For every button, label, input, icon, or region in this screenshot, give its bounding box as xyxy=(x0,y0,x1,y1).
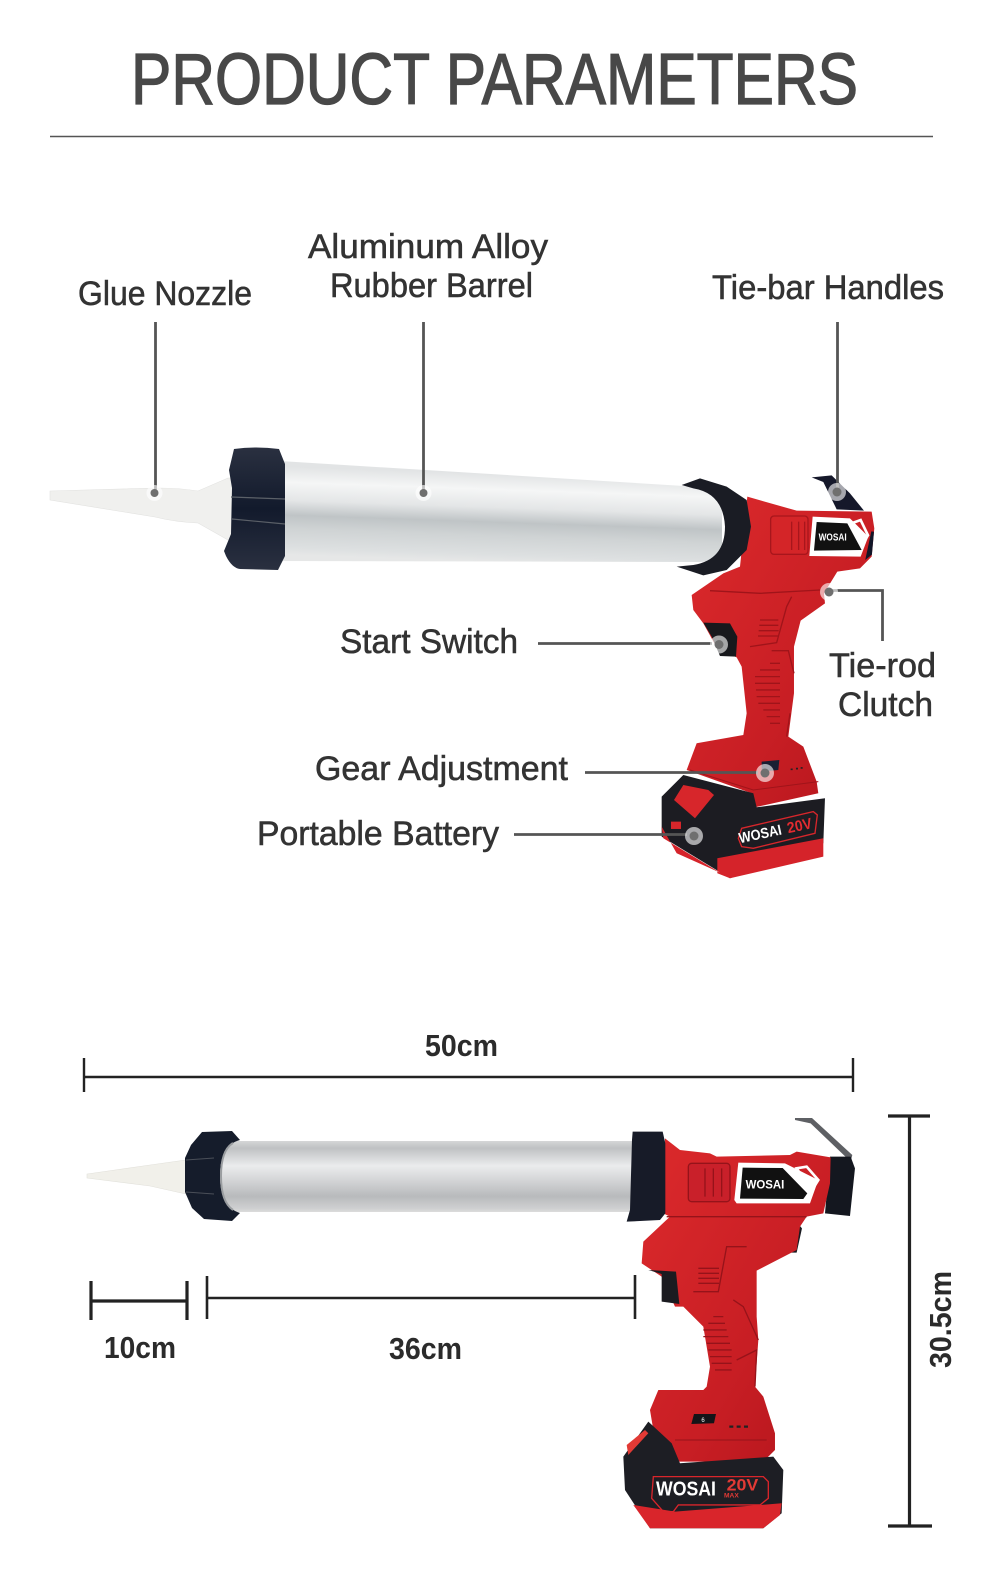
icon: side vent panel xyxy=(688,1163,730,1202)
icon: battery logo: 20V xyxy=(786,815,814,837)
icon: tie-bar handle xyxy=(795,1118,852,1162)
icon: grip ribs xyxy=(710,590,820,737)
callout: Gear Adjustment: Gear Adjustment xyxy=(315,750,569,788)
icon: gun body xyxy=(623,1118,855,1528)
dimension: barrel length 36cm: 36cm xyxy=(389,1331,462,1366)
callout: Gear Adjustment xyxy=(315,750,774,788)
icon: battery logo xyxy=(737,812,817,848)
icon: rear collar xyxy=(627,1132,665,1222)
dimension: total length 50cm: 50cm xyxy=(425,1028,498,1063)
icon: trigger xyxy=(648,1270,679,1304)
callout: Tie-bar Handles xyxy=(712,269,944,501)
callout: Tie-rod Clutch: Tie-rod xyxy=(829,647,936,685)
callout: Aluminum Alloy Rubber Barrel: Aluminum Alloy xyxy=(308,228,548,266)
icon: WOSAI badge: WOSAI xyxy=(819,533,847,544)
callout: Glue Nozzle xyxy=(78,275,252,501)
icon: battery xyxy=(662,775,825,878)
icon: red housing xyxy=(687,497,874,807)
icon: battery red base xyxy=(633,1503,782,1528)
icon: battery logo: WOSAI xyxy=(737,823,783,847)
icon: red housing xyxy=(642,1138,831,1462)
callout: Portable Battery xyxy=(257,815,703,853)
icon: rear tab xyxy=(789,1226,802,1253)
icon: battery red base xyxy=(662,827,823,878)
callout: Tie-rod Clutch: Clutch xyxy=(838,686,933,724)
icon: front cap xyxy=(185,1131,240,1221)
dimension diagram: caulking gun side view xyxy=(84,1028,958,1528)
icon: battery light xyxy=(671,822,681,829)
icon: WOSAI badge: WOSAI xyxy=(746,1178,784,1191)
dimension: height 30.5cm: 30.5cm xyxy=(923,1271,958,1368)
icon: gun body and grip xyxy=(662,475,874,878)
title: PRODUCT PARAMETERS xyxy=(131,40,858,120)
icon: battery logo: MAX xyxy=(724,1492,739,1499)
dimension: total length 50cm xyxy=(84,1028,853,1092)
icon: grip ribs xyxy=(667,1217,807,1387)
callout: Aluminum Alloy Rubber Barrel: Rubber Barrel xyxy=(330,267,533,305)
icon: trigger switch xyxy=(703,623,737,657)
icon: rear cap xyxy=(867,532,873,557)
dimension: barrel length 36cm xyxy=(207,1275,635,1366)
icon: side vent panel xyxy=(771,516,808,554)
dimension: height 30.5cm xyxy=(888,1116,958,1526)
icon: front barrel cap xyxy=(224,448,285,570)
callout: Start Switch xyxy=(340,623,728,661)
dimension: nozzle length 10cm: 10cm xyxy=(104,1330,176,1365)
icon: WOSAI badge xyxy=(734,1163,818,1203)
icon: nozzle xyxy=(87,1160,186,1194)
icon: battery logo xyxy=(652,1476,768,1512)
icon: WOSAI badge xyxy=(809,517,868,557)
icon: battery logo: 20V xyxy=(727,1476,758,1495)
icon: battery release button xyxy=(627,1430,648,1455)
icon: barrel xyxy=(215,1141,640,1212)
icon: aluminum barrel xyxy=(280,461,722,562)
icon: glue nozzle xyxy=(50,478,236,542)
icon: tie-bar handle xyxy=(812,475,864,511)
icon: rear cap xyxy=(825,1157,855,1216)
callout: Tie-bar Handles: Tie-bar Handles xyxy=(712,269,944,307)
icon: gear dial xyxy=(690,760,818,790)
icon: battery logo: WOSAI xyxy=(656,1478,716,1501)
icon: speed dial xyxy=(675,1414,767,1440)
icon: battery release button xyxy=(674,785,714,818)
icon: speed dial: 6 xyxy=(701,1418,705,1424)
icon: battery xyxy=(623,1422,783,1528)
callout: Tie-rod Clutch xyxy=(820,583,936,724)
callout: Start Switch: Start Switch xyxy=(340,623,518,661)
callout: Glue Nozzle: Glue Nozzle xyxy=(78,275,252,313)
callout: Portable Battery: Portable Battery xyxy=(257,815,499,853)
product illustration: caulking gun with callouts xyxy=(50,228,944,878)
icon: rear barrel collar xyxy=(677,478,751,575)
dimension: nozzle length 10cm xyxy=(91,1281,187,1365)
callout: Aluminum Alloy Rubber Barrel xyxy=(308,228,548,501)
